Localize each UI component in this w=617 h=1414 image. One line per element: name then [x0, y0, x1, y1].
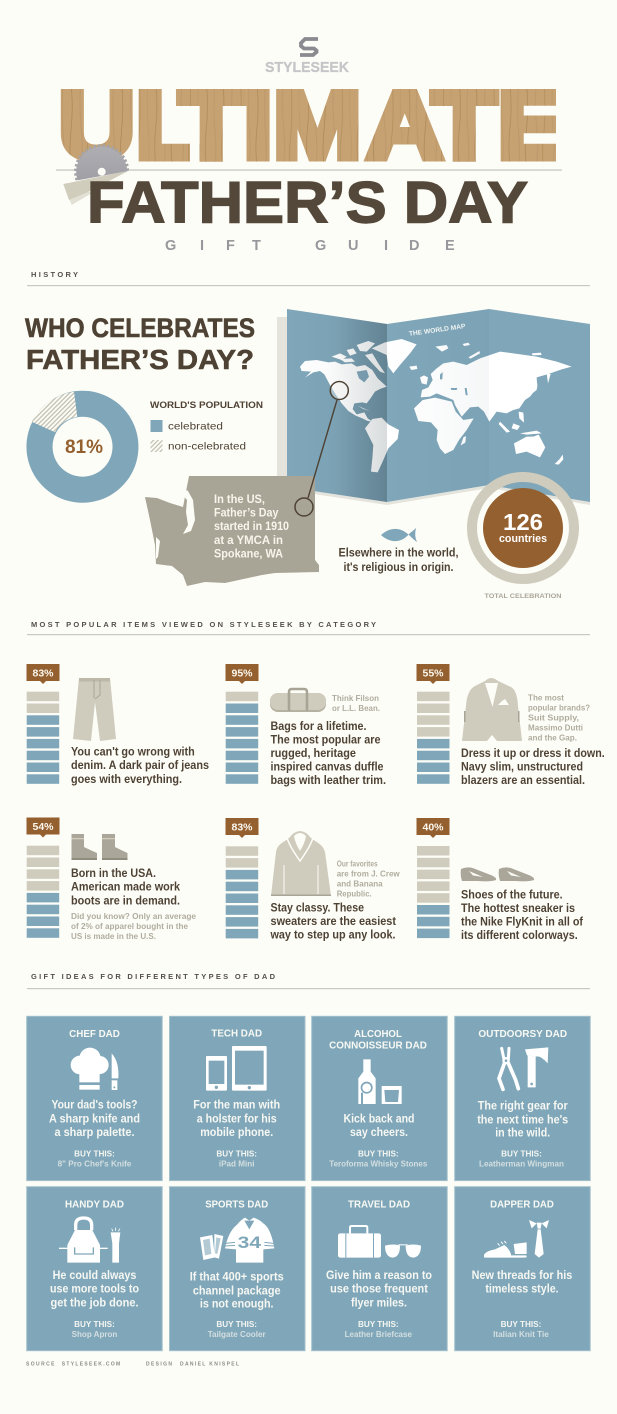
- text: boots: Born in the USA.: [71, 868, 156, 880]
- side note: and the Gap.: [528, 732, 577, 742]
- side note: US is made in the U.S.: [71, 931, 156, 941]
- side note: [71, 911, 196, 941]
- side note: Did you know? Only an average: [71, 911, 196, 921]
- footer credits: DESIGN: [146, 1362, 172, 1368]
- footer credits: SOURCE: [26, 1362, 55, 1368]
- card: alcohol connoisseur dad: Teroforma Whisky Stones: [329, 1159, 428, 1169]
- callout: 126 countries: countries: [499, 533, 547, 545]
- text: sneakers: the Nike FlyKnit in all of: [461, 917, 583, 929]
- callout: 126 countries: 126: [503, 509, 543, 535]
- text: religious origin: [338, 548, 458, 574]
- card: travel dad: use those frequent: [330, 1284, 428, 1296]
- text: bags: inspired canvas duffle: [270, 762, 384, 774]
- card: chef dad: a sharp palette.: [54, 1127, 134, 1139]
- logo wordmark: STYLESEEK: [265, 60, 350, 76]
- card: handy dad: use more tools to: [50, 1284, 139, 1296]
- icon: tickets and jersey: 34: [238, 1233, 262, 1252]
- text: jeans: You can't go wrong with: [71, 746, 195, 758]
- legend: world's population: WORLD'S POPULATION: [150, 400, 263, 411]
- panel: sweaters 83%: [226, 818, 400, 942]
- card: sports dad: SPORTS DAD: [205, 1198, 269, 1210]
- text: jeans: [71, 746, 209, 786]
- card: alcohol connoisseur dad: CONNOISSEUR DAD: [329, 1039, 427, 1051]
- legend: world's population: non-celebrated: [168, 440, 246, 452]
- caption: total celebration: TOTAL CELEBRATION: [484, 593, 562, 600]
- text: sneakers: The hottest sneaker is: [461, 903, 575, 915]
- panel: boots 54%: [26, 818, 196, 941]
- icon: chef hat and knife: [71, 1048, 118, 1090]
- heading: who celebrates father's day: FATHER’S DAY?: [26, 344, 254, 375]
- text: blazers: [461, 748, 605, 787]
- card: outdoorsy dad: [455, 1016, 590, 1181]
- icon: sweater: [271, 831, 331, 896]
- card: tech dad: a holster for his: [197, 1113, 277, 1125]
- icon: duffle bag: [270, 689, 326, 712]
- Washington state caption: Spokane, WA: [214, 548, 283, 560]
- card: alcohol connoisseur dad: Kick back and: [344, 1113, 414, 1125]
- map pin connecting US to Spokane: [295, 382, 348, 516]
- side note: or L.L. Bean.: [332, 703, 380, 713]
- card: tech dad: [170, 1016, 305, 1181]
- text: sneakers: [461, 889, 583, 942]
- percent badge: [26, 818, 60, 838]
- icon: briefcase and sunglasses: [338, 1226, 421, 1258]
- card: tech dad: TECH DAD: [211, 1028, 262, 1040]
- card: sports dad: Tailgate Cooler: [208, 1329, 266, 1339]
- icon: blazer: [462, 678, 522, 741]
- stripe bar: [226, 846, 258, 938]
- text: bags: The most popular are: [270, 734, 380, 746]
- legend: world's population: [150, 400, 263, 452]
- card: chef dad: CHEF DAD: [69, 1028, 120, 1040]
- text: jeans: goes with everything.: [71, 774, 182, 786]
- stripe bar: [226, 692, 258, 784]
- card: dapper dad: BUY THIS:: [501, 1319, 542, 1329]
- text: sweaters: way to step up any look.: [270, 930, 396, 942]
- footer credits: DANIEL KNISPEL: [180, 1362, 239, 1368]
- percent badge: 83%: [231, 822, 253, 834]
- text: boots: [71, 868, 181, 907]
- icon: S mark: [300, 39, 318, 55]
- percent badge: 54%: [32, 821, 54, 833]
- percent badge: [416, 664, 450, 684]
- percent badge: 40%: [422, 822, 444, 834]
- heading: who celebrates father's day: [25, 313, 255, 375]
- card: dapper dad: timeless style.: [485, 1284, 559, 1296]
- card: sports dad: [170, 1187, 305, 1351]
- map: Washington state with text: [145, 476, 319, 586]
- stripe bar: [417, 846, 450, 938]
- side note: Suit Supply,: [528, 712, 579, 722]
- side note: and Banana: [337, 878, 383, 888]
- icon: dress shoe and tie: [484, 1220, 549, 1258]
- card: tech dad: iPad Mini: [219, 1159, 255, 1169]
- stripe bar: [417, 692, 450, 784]
- text: blazers: Navy slim, unstructured: [461, 762, 583, 774]
- card: dapper dad: DAPPER DAD: [490, 1198, 554, 1210]
- footer credits: STYLESEEK.COM: [62, 1362, 120, 1368]
- panel: blazers 55%: [416, 664, 605, 787]
- card: alcohol connoisseur dad: say cheers.: [350, 1127, 408, 1139]
- panel: sneakers 40%: [416, 818, 583, 942]
- side note: Republic.: [337, 888, 372, 898]
- card: handy dad: Shop Apron: [72, 1329, 117, 1339]
- Washington state caption: started in 1910: [214, 521, 289, 533]
- card: outdoorsy dad: OUTDOORSY DAD: [478, 1028, 567, 1040]
- card: handy dad: HANDY DAD: [65, 1199, 124, 1211]
- title: father's day: FATHER’S DAY: [87, 170, 528, 236]
- side note: Think Filson: [332, 693, 379, 703]
- side note: [337, 858, 400, 898]
- continents: western hemisphere: [300, 339, 417, 472]
- text: bags: bags with leather trim.: [270, 775, 386, 787]
- icon: whisky bottle and glass: [358, 1059, 402, 1104]
- icon: sneakers: [461, 867, 534, 881]
- side note: of 2% of apparel bought in the: [71, 921, 188, 931]
- card: handy dad: BUY THIS:: [74, 1319, 115, 1329]
- donut value: 81%: [65, 437, 103, 458]
- icon: phone and tablet: [206, 1046, 267, 1091]
- card: handy dad: get the job done.: [50, 1297, 138, 1309]
- section heading: gift ideas: GIFT IDEAS FOR DIFFERENT TYPES OF DAD: [31, 972, 276, 981]
- card: handy dad: [27, 1187, 162, 1351]
- text: sneakers: Shoes of the future.: [461, 889, 563, 901]
- stripe bar: [27, 692, 59, 784]
- side note: [528, 693, 590, 742]
- subtitle: gift guide: GIFT GUIDE: [165, 238, 455, 254]
- text: sneakers: its different colorways.: [461, 930, 578, 942]
- side note: popular brands?: [528, 702, 590, 712]
- card: chef dad: 8" Pro Chef's Knife: [58, 1159, 132, 1169]
- card: alcohol connoisseur dad: [312, 1016, 447, 1181]
- title word: ultimate in wood texture: ULTIMATE: [58, 70, 569, 179]
- side note: Massimo Dutti: [528, 722, 583, 732]
- text: blazers: blazers are an essential.: [461, 775, 585, 787]
- text: sweaters: Stay classy. These: [270, 902, 364, 914]
- card: outdoorsy dad: in the wild.: [495, 1128, 550, 1140]
- card: sports dad: channel package: [193, 1285, 281, 1297]
- folded world map: [277, 309, 590, 505]
- percent badge: 83%: [32, 668, 54, 680]
- card: sports dad: is not enough.: [200, 1299, 274, 1311]
- card: tech dad: BUY THIS:: [216, 1149, 257, 1159]
- percent badge: [226, 818, 258, 838]
- text: jeans: denim. A dark pair of jeans: [71, 760, 209, 772]
- card: travel dad: TRAVEL DAD: [348, 1198, 410, 1210]
- stripe bar: [27, 846, 59, 938]
- logo: StyleSeek: [265, 39, 350, 76]
- card: outdoorsy dad: Leatherman Wingman: [479, 1159, 564, 1169]
- text: bags: Bags for a lifetime.: [270, 721, 366, 733]
- Washington state caption: at a YMCA in: [214, 535, 283, 547]
- card: sports dad: BUY THIS:: [216, 1319, 257, 1329]
- card: travel dad: Give him a reason to: [326, 1270, 432, 1282]
- map label: THE WORLD MAP: [408, 323, 467, 338]
- text: boots: boots are in demand.: [71, 895, 180, 907]
- card: travel dad: [312, 1187, 447, 1351]
- map fold shading on paper: [287, 309, 387, 502]
- percent badge: 55%: [422, 668, 444, 680]
- card: chef dad: A sharp knife and: [49, 1113, 140, 1125]
- card: dapper dad: [455, 1187, 590, 1351]
- map fold shading over continents: [287, 309, 387, 502]
- map panels: [287, 309, 590, 502]
- legend: world's population: celebrated: [168, 420, 223, 432]
- card: outdoorsy dad: The right gear for: [478, 1101, 568, 1113]
- side note: Our favorites: [337, 858, 378, 868]
- panel: bags 95%: [226, 664, 386, 787]
- text: religious origin: it's religious in origin.: [344, 562, 454, 574]
- text: sweaters: [270, 902, 396, 942]
- card: outdoorsy dad: the next time he's: [477, 1114, 568, 1126]
- card: travel dad: Leather Briefcase: [345, 1329, 412, 1339]
- donut chart: world's population: [26, 391, 138, 503]
- side note: [332, 693, 380, 713]
- percent badge: [26, 664, 60, 684]
- card: dapper dad: Italian Knit Tie: [493, 1329, 549, 1339]
- card: travel dad: flyer miles.: [351, 1297, 407, 1309]
- card: tech dad: For the man with: [193, 1100, 280, 1112]
- text: blazers: Dress it up or dress it down.: [461, 748, 605, 760]
- icon: circular saw cutting wood: [63, 146, 128, 205]
- percent badge: 95%: [231, 668, 253, 680]
- Washington state caption: Father’s Day: [214, 508, 279, 520]
- text: boots: American made work: [71, 882, 181, 894]
- icon: apron and flashlight: [59, 1218, 120, 1263]
- text: bags: [270, 721, 386, 787]
- icon: multitool and axe: [499, 1047, 548, 1089]
- card: alcohol connoisseur dad: BUY THIS:: [358, 1149, 399, 1159]
- Washington state caption: In the US,: [214, 494, 265, 506]
- card: sports dad: If that 400+ sports: [190, 1271, 284, 1283]
- card: travel dad: BUY THIS:: [358, 1319, 399, 1329]
- icon: jeans: [73, 678, 116, 741]
- text: religious origin: Elsewhere in the world,: [338, 548, 458, 560]
- footer credits: [26, 1362, 239, 1368]
- card: chef dad: BUY THIS:: [74, 1149, 115, 1159]
- percent badge: [226, 664, 258, 684]
- card: tech dad: mobile phone.: [200, 1127, 273, 1139]
- card: outdoorsy dad: BUY THIS:: [501, 1149, 542, 1159]
- title: Ultimate Father's Day Gift Guide: [56, 89, 562, 250]
- map shadow: [277, 317, 590, 505]
- text: bags: rugged, heritage: [270, 748, 356, 760]
- card: handy dad: He could always: [53, 1270, 136, 1282]
- card: chef dad: [27, 1016, 162, 1181]
- text: sweaters: sweaters are the easiest: [270, 916, 396, 928]
- continents: eastern hemisphere: [409, 343, 572, 465]
- Washington state caption: [214, 494, 289, 560]
- heading: who celebrates father's day: WHO CELEBRATES: [25, 313, 255, 343]
- icon: work boots: [72, 834, 128, 860]
- card: chef dad: Your dad's tools?: [52, 1100, 138, 1112]
- callout: 126 countries: [472, 477, 574, 600]
- panel: jeans 83%: [26, 664, 209, 786]
- section heading: most popular items: MOST POPULAR ITEMS VIEWED ON STYLESEEK BY CATEGORY: [31, 620, 376, 629]
- card: alcohol connoisseur dad: ALCOHOL: [354, 1028, 402, 1040]
- icon: tickets and jersey: [200, 1218, 274, 1263]
- percent badge: [416, 818, 450, 838]
- side note: The most: [528, 693, 564, 703]
- card: dapper dad: New threads for his: [472, 1270, 572, 1282]
- icon: fish: [381, 528, 417, 542]
- section heading: history: HISTORY: [31, 270, 78, 279]
- side note: are from J. Crew: [337, 868, 400, 878]
